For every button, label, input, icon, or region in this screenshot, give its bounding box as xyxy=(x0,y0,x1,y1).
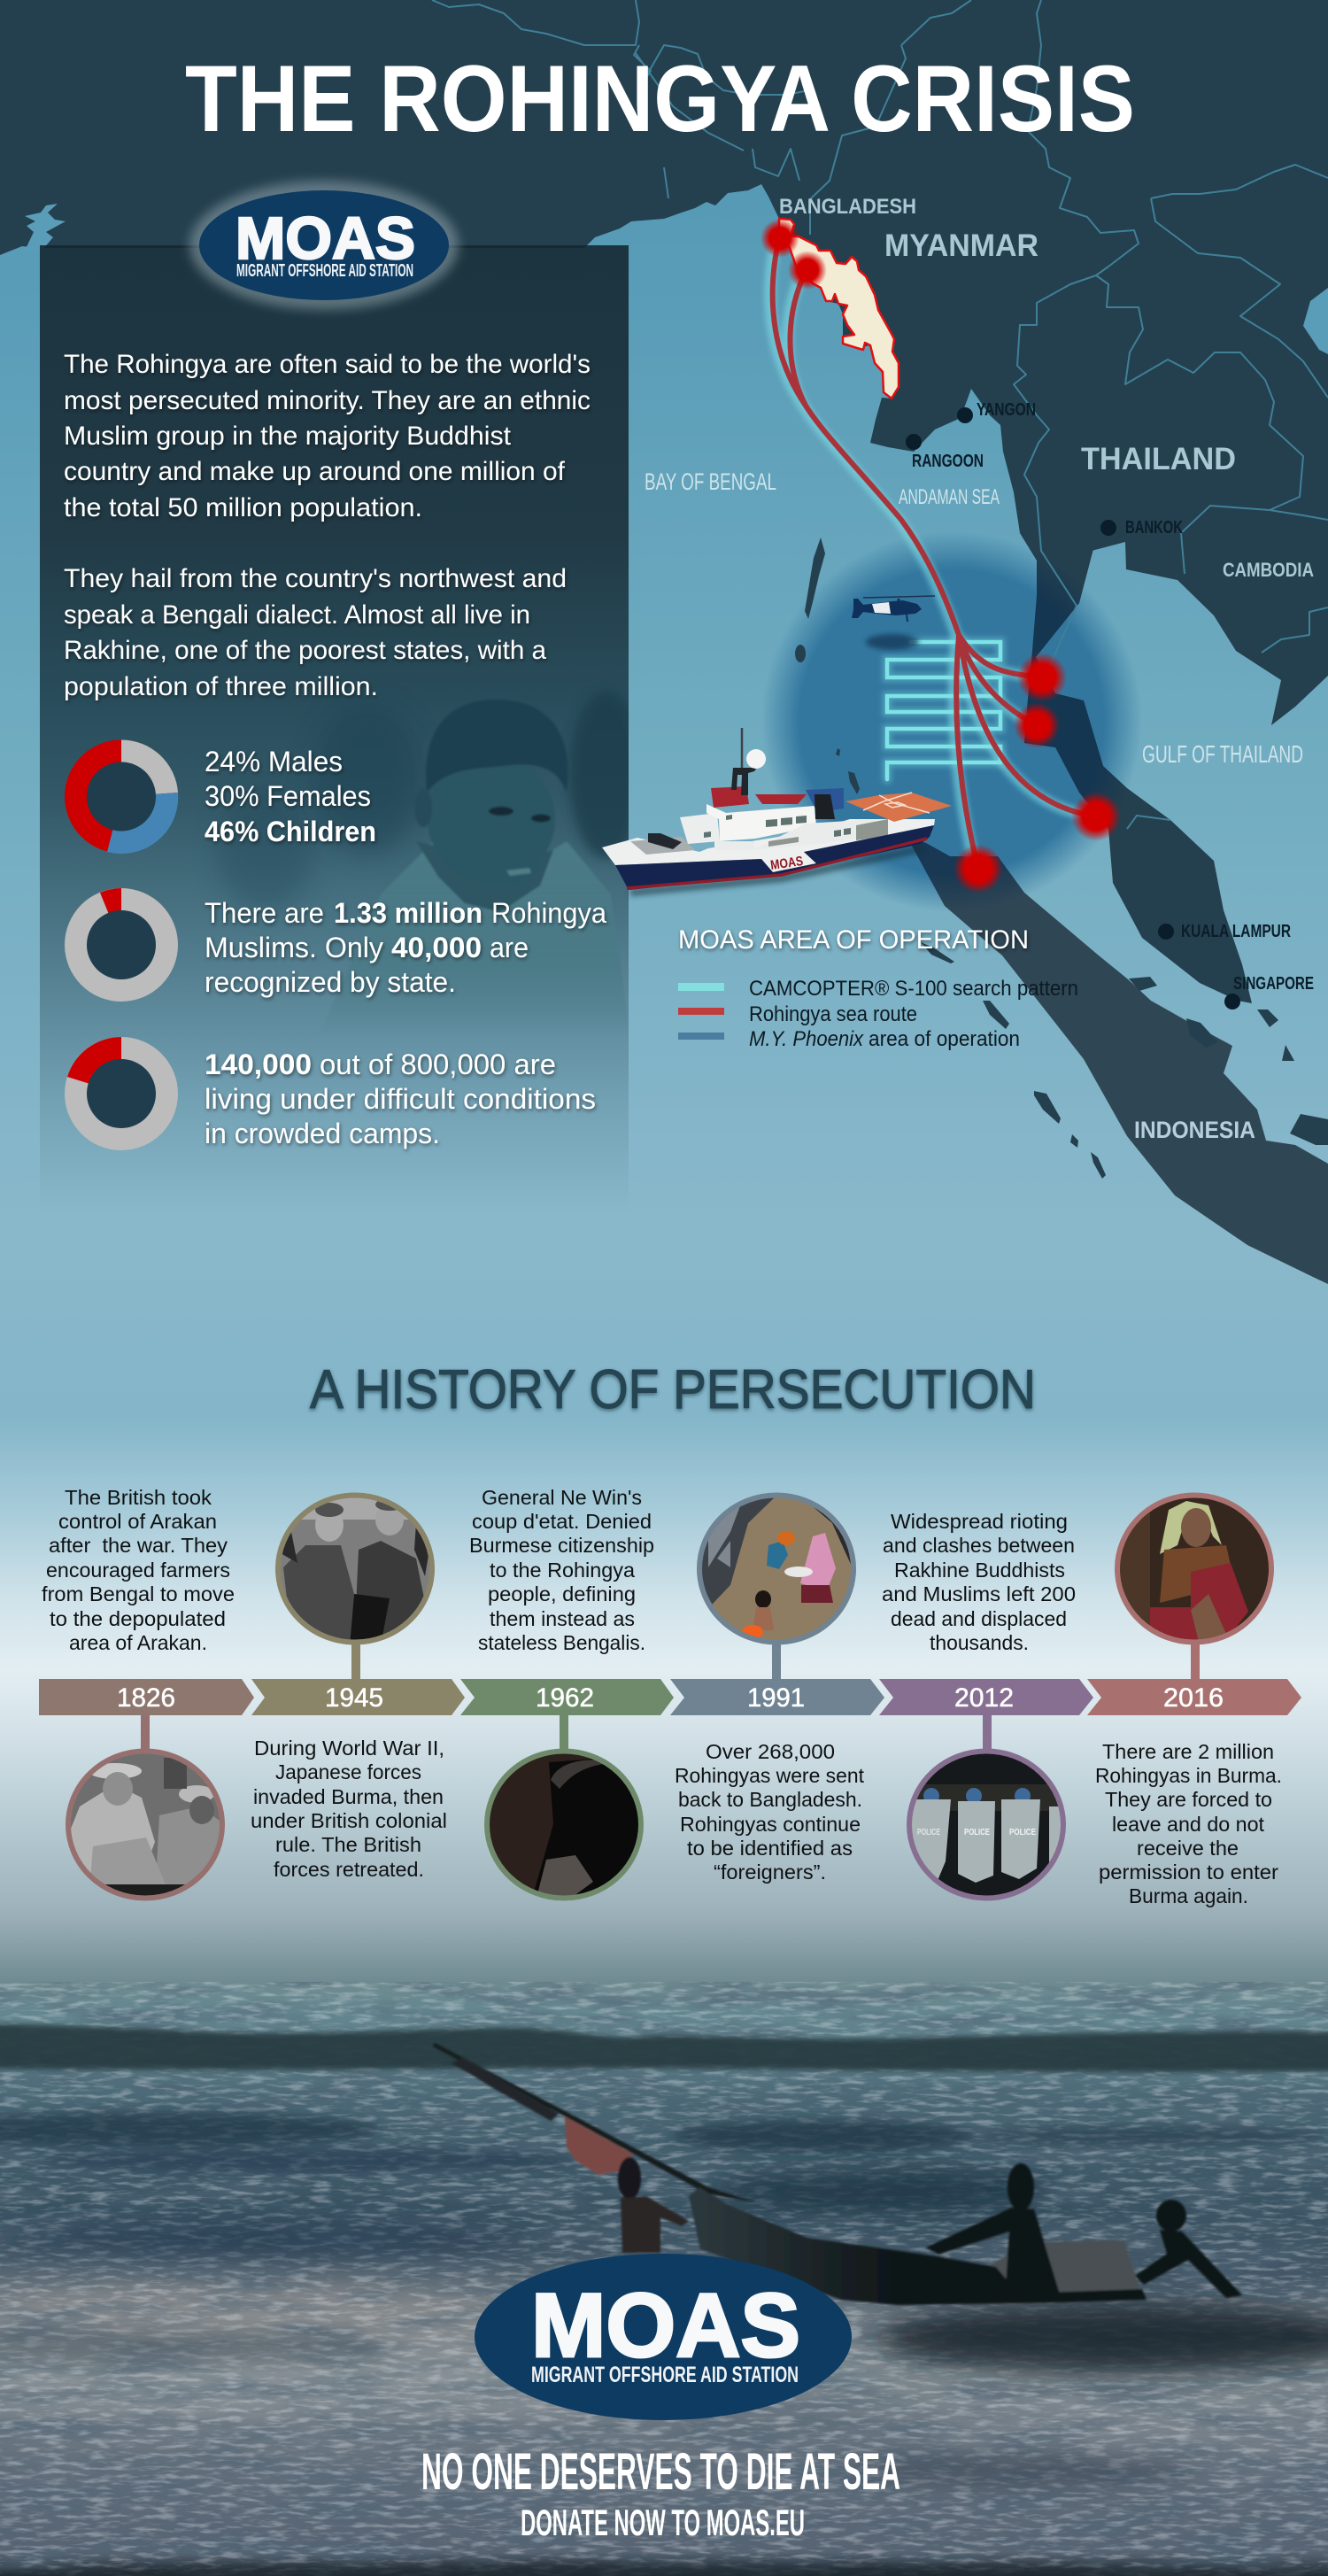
map labels: THAILAND xyxy=(1081,442,1236,476)
legend title: MOAS AREA OF OPERATION xyxy=(678,925,1029,955)
cargo xyxy=(988,2240,1140,2294)
text: 1826: from Bengal to move xyxy=(42,1582,235,1605)
camps text: in crowded camps. xyxy=(205,1118,440,1149)
map labels: INDONESIA xyxy=(1134,1117,1255,1143)
map labels: BANKOK xyxy=(1125,518,1183,538)
icon: camcopter helicopter xyxy=(852,596,935,650)
legend: moas area of operation xyxy=(678,925,1078,1051)
islands xyxy=(795,538,1328,1179)
timeline arrows xyxy=(39,1679,1301,1715)
photo: 1991 refugee camp xyxy=(697,1493,856,1645)
text: 1962: to the Rohingya xyxy=(490,1559,635,1582)
foredeck xyxy=(630,837,695,855)
windows xyxy=(704,815,851,838)
text: 2016: receive the xyxy=(1137,1837,1239,1860)
text: 1991: Rohingyas continue xyxy=(680,1813,861,1836)
text: 2016: leave and do not xyxy=(1112,1813,1265,1836)
demographics text: 24% Males xyxy=(205,746,343,777)
text: 1991: back to Bangladesh. xyxy=(678,1788,862,1811)
text: 1991: Rohingyas were sent xyxy=(675,1764,865,1787)
map labels: ANDAMAN SEA xyxy=(899,485,1000,509)
text: 1962: General Ne Win's xyxy=(482,1486,642,1509)
mainland xyxy=(0,0,1328,1003)
waterline xyxy=(627,839,927,888)
timeline years: 2016 xyxy=(1163,1683,1224,1713)
text: 1826: area of Arakan. xyxy=(69,1631,207,1654)
navy hull xyxy=(615,825,934,890)
pole and flags xyxy=(433,2043,756,2202)
text: 1945: Japanese forces xyxy=(275,1760,421,1783)
tonle sap lake xyxy=(1303,288,1328,354)
demographics text: 30% Females xyxy=(205,780,371,812)
city dots xyxy=(906,407,1240,1010)
text: 2016: They are forced to xyxy=(1105,1788,1272,1811)
bottom moas logo: MOAS xyxy=(531,2275,800,2376)
camps text: out of 800,000 are xyxy=(320,1048,556,1080)
person standing in boat xyxy=(926,2208,1062,2300)
text: 1962: them instead as xyxy=(490,1607,635,1630)
legend labels xyxy=(749,977,1078,1051)
boat hull xyxy=(689,2187,1147,2305)
main superstructure xyxy=(706,804,816,841)
hull logo: MOAS xyxy=(769,854,804,873)
legend labels: area of operation xyxy=(869,1027,1020,1051)
legend labels: Rohingya sea route xyxy=(749,1002,917,1026)
text: 2016: Burma again. xyxy=(1129,1884,1248,1907)
population text: 40,000 xyxy=(391,932,482,963)
text: 2016 xyxy=(1095,1740,1282,1907)
top moas logo xyxy=(189,181,459,310)
text: 2016: Rohingyas in Burma. xyxy=(1095,1764,1282,1787)
footer sea photograph xyxy=(0,1922,1328,2576)
donut chart: recognized by state xyxy=(65,888,178,1002)
bottom moas logo xyxy=(475,2254,852,2420)
map labels: RANGOON xyxy=(912,452,984,471)
map labels: BAY OF BENGAL xyxy=(645,468,776,495)
route lines xyxy=(770,238,1096,869)
red arrival points xyxy=(761,219,1121,893)
text: 1991: “foreigners”. xyxy=(714,1860,826,1884)
search pattern xyxy=(887,642,1000,779)
text: 2012: Rakhine Buddhists xyxy=(894,1559,1065,1582)
population text: There are xyxy=(205,897,324,929)
M.Y. Phoenix area of operation circle xyxy=(761,531,1142,912)
timeline years: 1991 xyxy=(747,1683,805,1713)
ship shadow xyxy=(630,848,923,893)
text: 1962: Burmese citizenship xyxy=(469,1534,654,1557)
panel: intro and statistics xyxy=(40,245,644,1211)
text: 1826: to the depopulated xyxy=(50,1607,226,1630)
timeline years: 1962 xyxy=(536,1683,594,1713)
country borders xyxy=(432,0,1328,829)
intro text: the total 50 million population. xyxy=(64,493,422,522)
intro text: population of three million. xyxy=(64,672,378,701)
demographics text: 46% Children xyxy=(205,816,376,847)
intro text: Rakhine, one of the poorest states, with a xyxy=(64,636,546,665)
camps text xyxy=(205,1048,596,1149)
container xyxy=(806,788,844,812)
timeline xyxy=(39,1486,1301,1907)
text: 1962 xyxy=(469,1486,654,1654)
intro text: country and make up around one million of xyxy=(64,457,566,486)
title: THE ROHINGYA CRISIS xyxy=(185,45,1135,151)
text: 1962: coup d'etat. Denied xyxy=(472,1510,652,1533)
text: 1945 xyxy=(251,1737,447,1881)
timeline years: 1826 xyxy=(117,1683,175,1713)
photo: 2012 riot police: POLICE xyxy=(917,1828,940,1837)
text: 1945: rule. The British xyxy=(275,1833,421,1856)
map of the region xyxy=(0,0,1328,1284)
text: 2012: and clashes between xyxy=(883,1534,1075,1557)
text: 1962: people, defining xyxy=(488,1582,636,1605)
text: 2016: There are 2 million xyxy=(1102,1740,1274,1763)
top moas logo: MIGRANT OFFSHORE AID STATION xyxy=(236,261,413,281)
demographics text xyxy=(205,746,376,847)
text: 1991 xyxy=(675,1740,865,1884)
timeline years: 2012 xyxy=(954,1683,1014,1713)
person at the bow xyxy=(618,2157,641,2200)
text: 1826: encouraged farmers xyxy=(46,1559,230,1582)
population text: are xyxy=(490,932,529,963)
bottom moas logo: MIGRANT OFFSHORE AID STATION xyxy=(531,2363,799,2387)
legend labels: CAMCOPTER® S-100 search pattern xyxy=(749,977,1078,1001)
timeline years xyxy=(117,1683,1224,1713)
population text: Rohingya xyxy=(491,897,606,929)
photo: 1826 soldiers xyxy=(66,1749,225,1902)
donut chart: demographics xyxy=(65,739,178,854)
donut chart: crowded camps xyxy=(65,1037,178,1150)
text: 1826: after the war. They xyxy=(49,1534,228,1557)
text: 2012: Widespread rioting xyxy=(891,1510,1068,1533)
text: 2012 xyxy=(882,1510,1076,1654)
intro text: speak a Bengali dialect. Almost all live in xyxy=(64,600,530,630)
heading: a history of persecution: A HISTORY OF PERSECUTION xyxy=(310,1359,1036,1420)
text: 1826: control of Arakan xyxy=(58,1510,217,1533)
river delta inlet xyxy=(24,204,66,252)
photo: 1945 japanese soldiers xyxy=(274,1493,435,1645)
text: 1991: to be identified as xyxy=(687,1837,853,1860)
person pushing boat xyxy=(1135,2230,1242,2298)
photo: 2012 riot police: POLICE xyxy=(1009,1828,1036,1837)
intro text: most persecuted minority. They are an ethnic xyxy=(64,386,591,415)
intro text: The Rohingya are often said to be the world's xyxy=(64,350,591,379)
population text: 1.33 million xyxy=(334,897,483,929)
boat and people silhouette xyxy=(433,2043,1242,2305)
text: 1991: Over 268,000 xyxy=(706,1740,835,1763)
mast and radome xyxy=(741,728,743,768)
area of operation shading over land xyxy=(0,0,1328,1284)
timeline stems xyxy=(141,1643,1200,1751)
deck gear xyxy=(711,786,807,808)
photo: 1962 man in shadow xyxy=(484,1749,644,1901)
map labels: YANGON xyxy=(977,400,1036,420)
text: 1962: stateless Bengalis. xyxy=(478,1631,645,1654)
photo: 2016 rohingya woman xyxy=(1115,1493,1276,1645)
text: 1945: under British colonial xyxy=(251,1809,447,1832)
intro text xyxy=(64,350,591,701)
population text xyxy=(205,897,606,998)
intro text: Muslim group in the majority Buddhist xyxy=(64,422,512,451)
map labels: MYANMAR xyxy=(884,228,1038,263)
water texture xyxy=(0,1982,1328,2576)
footer call to action: DONATE NOW TO MOAS.EU xyxy=(521,2502,805,2543)
rakhine state xyxy=(779,219,899,398)
rohingya sea routes xyxy=(770,238,1096,869)
camps text: 140,000 xyxy=(205,1048,312,1080)
map labels: BANGLADESH xyxy=(779,195,916,219)
text: 1826: The British took xyxy=(65,1486,212,1509)
text: 2012: thousands. xyxy=(930,1631,1029,1654)
photo: 2012 riot police: POLICE xyxy=(964,1828,990,1837)
photo: 2012 riot police xyxy=(907,1749,1068,1901)
text: 2016: permission to enter xyxy=(1099,1860,1278,1884)
population text: Muslims. Only xyxy=(205,932,383,963)
text: 1945: invaded Burma, then xyxy=(253,1785,444,1808)
text: 1945: forces retreated. xyxy=(274,1858,424,1881)
helideck xyxy=(845,793,952,822)
photo: child behind the statistics xyxy=(217,691,644,1036)
intro text: They hail from the country's northwest and xyxy=(64,564,567,593)
text: 1945: During World War II, xyxy=(254,1737,444,1760)
legend swatches xyxy=(678,983,724,1040)
text: 1826 xyxy=(42,1486,235,1654)
legend labels: M.Y. Phoenix xyxy=(749,1027,864,1051)
text: 2012: and Muslims left 200 xyxy=(882,1582,1076,1605)
map labels: CAMBODIA xyxy=(1223,559,1314,581)
footer slogan: NO ONE DESERVES TO DIE AT SEA xyxy=(421,2443,900,2501)
camps text: living under difficult conditions xyxy=(205,1083,596,1115)
sumatra xyxy=(907,838,1328,1284)
icon: M.Y. Phoenix ship xyxy=(602,728,952,893)
hull white xyxy=(602,819,935,872)
timeline years: 1945 xyxy=(325,1683,383,1713)
forward cabin xyxy=(680,813,720,844)
map labels: KUALA LAMPUR xyxy=(1181,922,1291,941)
population text: recognized by state. xyxy=(205,966,456,998)
top moas logo: MOAS xyxy=(235,205,415,272)
text: 2012: dead and displaced xyxy=(891,1607,1067,1630)
map labels xyxy=(645,195,1314,1143)
